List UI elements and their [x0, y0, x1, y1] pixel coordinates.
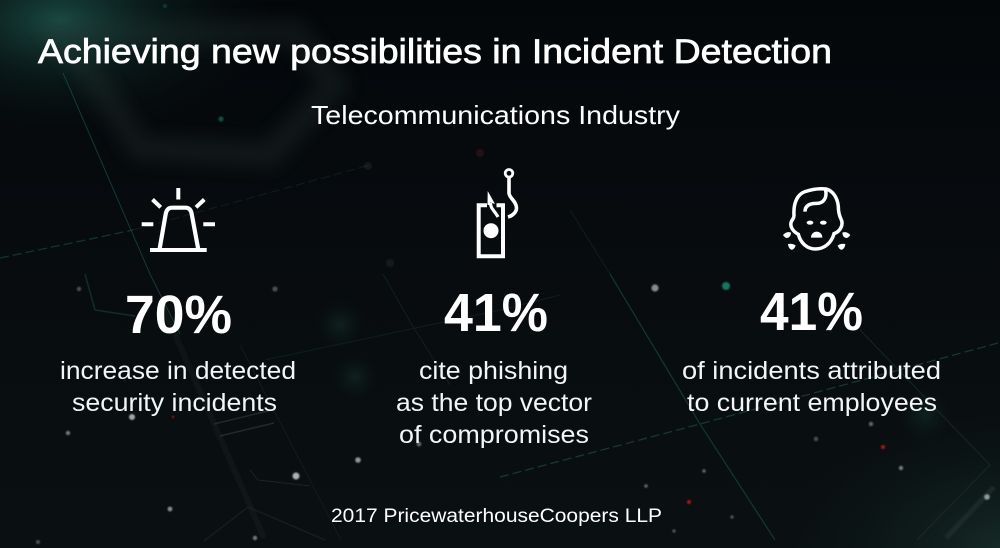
label: increase in detected security incidents: increase in detected: [60, 357, 296, 385]
icon: phishing hook and document: [479, 170, 516, 256]
label: increase in detected security incidents: security incidents: [72, 389, 277, 417]
panel: current employees: [682, 189, 941, 417]
label: cite phishing as the top vector of compromises: as the top vector: [396, 389, 592, 417]
subtitle: Telecommunications Industry: [311, 100, 680, 130]
stat: 70%: 70%: [125, 285, 232, 345]
icon: alarm light: [142, 188, 215, 250]
label: increase in detected security incidents: [60, 357, 296, 417]
label: of incidents attributed to current employees: to current employees: [687, 389, 937, 417]
icon: worried face: [783, 189, 850, 250]
label: cite phishing as the top vector of compromises: of compromises: [399, 421, 589, 449]
label: of incidents attributed to current employees: [682, 357, 941, 417]
title: Achieving new possibilities in Incident Detection: [38, 33, 832, 71]
label: cite phishing as the top vector of compromises: cite phishing: [419, 357, 568, 385]
label: of incidents attributed to current employees: of incidents attributed: [682, 357, 941, 385]
stat: 41%: 41%: [444, 283, 548, 343]
panel: detected incidents: [60, 188, 296, 417]
label: cite phishing as the top vector of compromises: [396, 357, 592, 449]
stat: 41%: 41%: [760, 282, 863, 342]
footer credit: 2017 PricewaterhouseCoopers LLP: [331, 506, 662, 527]
panel: phishing: [396, 170, 592, 449]
